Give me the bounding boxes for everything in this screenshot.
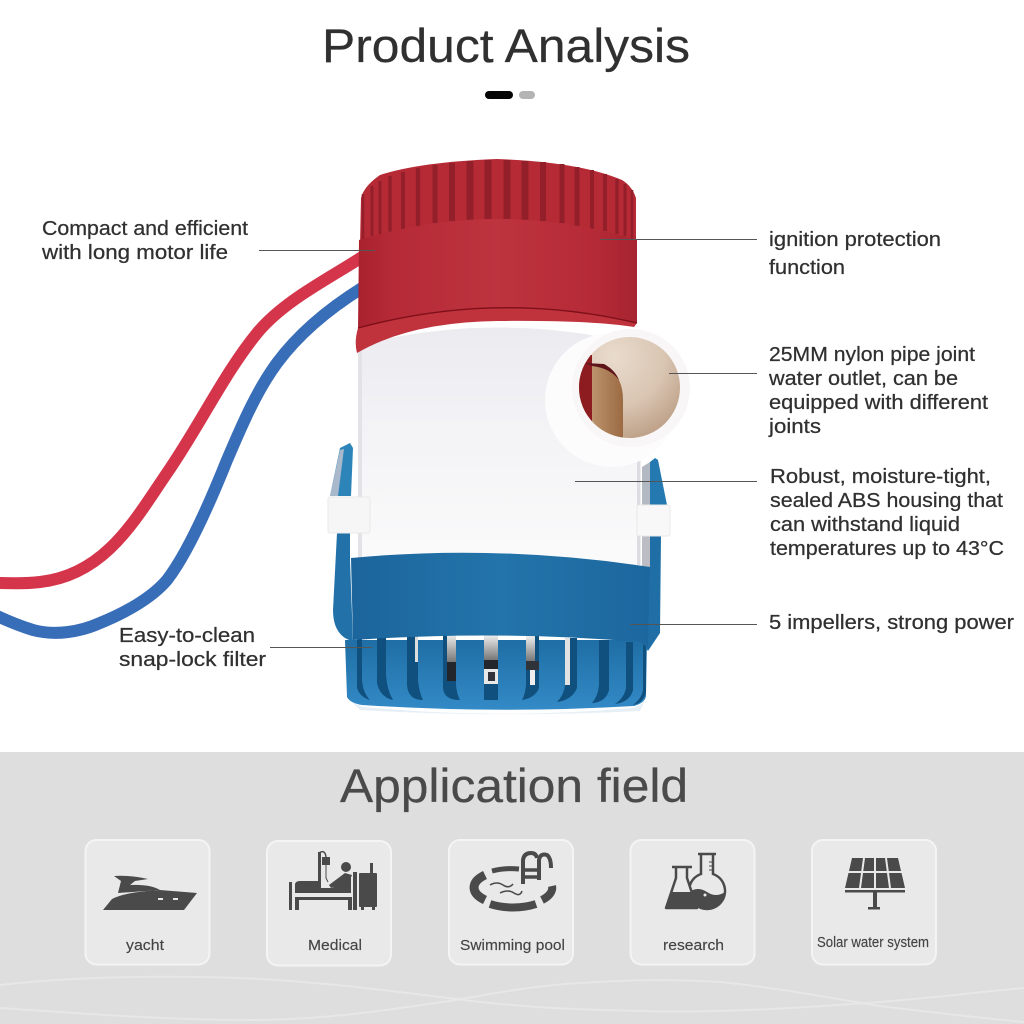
callout: compact and efficient [41,218,248,264]
card: research [630,840,754,964]
pump: red cap band [358,219,637,329]
callout: ABS housing: Robust, moisture-tight, [770,466,991,488]
icon: hospital bed [289,852,377,910]
pump: filter slots [357,634,646,705]
icon: solar panel [845,858,905,910]
card: swimming pool [449,840,573,964]
callout lines [259,240,757,648]
heading: Application field: Application field [340,759,688,812]
card: medical [267,841,391,966]
card: yacht [86,840,210,964]
callout: compact and efficient: with long motor life [41,242,228,264]
pump: left white strap [328,497,370,533]
callout: ABS housing: can withstand liquid [770,514,960,536]
pump: right clip lower [640,535,661,651]
heading: Product Analysis: Product Analysis [322,19,690,72]
callout: ABS housing [770,466,1004,560]
callout: ABS housing: sealed ABS housing that [770,490,1003,512]
pump: outlet pipe [545,329,690,467]
callout: snap-lock filter: Easy-to-clean [119,625,255,647]
callout: snap-lock filter [119,625,266,671]
callout: impellers: 5 impellers, strong power [769,612,1014,634]
pump: left clip lower [333,533,353,642]
callout: ignition protection [769,229,941,279]
pump: right white strap [637,505,670,536]
callout: 25MM pipe joint: water outlet, can be [768,368,958,390]
callout: compact and efficient: Compact and efficient [42,218,248,240]
product photo: bilge pump [328,159,690,714]
label: yacht: yacht [126,937,165,954]
pump: cap seam [358,308,637,328]
callout: 25MM pipe joint [768,344,988,438]
callout: 25MM pipe joint: 25MM nylon pipe joint [769,344,975,366]
pump: blue filter base [345,634,647,714]
icon: lab flasks [666,854,725,910]
label: medical: Medical [308,937,362,954]
callout: ABS housing: temperatures up to 43°C [770,538,1004,560]
pump: blue band [351,553,650,648]
callout: ignition protection: ignition protection [769,229,941,251]
pump: red cap lip [356,308,637,353]
label: solar water system: Solar water system [817,934,929,951]
panel: application field background [0,752,1024,1024]
callout: 25MM pipe joint: equipped with different [769,392,988,414]
callout: ignition protection: function [769,257,845,279]
icon: pool with ladder [474,853,552,907]
pump: white housing [359,328,640,570]
title pager dots [485,91,535,99]
callout: snap-lock filter: snap-lock filter [119,649,266,671]
label: research: research [663,937,724,954]
pump: housing side shading [358,345,640,565]
background waves [0,977,1024,1022]
card: solar water system [812,840,936,964]
callout: 25MM pipe joint: joints [768,416,821,438]
pump: red cap top with ribs [360,159,636,245]
icon: yacht [103,876,197,910]
pump: right clip upper [642,458,667,505]
label: swimming pool: Swimming pool [460,937,565,954]
pump: left clip upper [330,443,353,496]
wires: red and blue [0,257,362,633]
